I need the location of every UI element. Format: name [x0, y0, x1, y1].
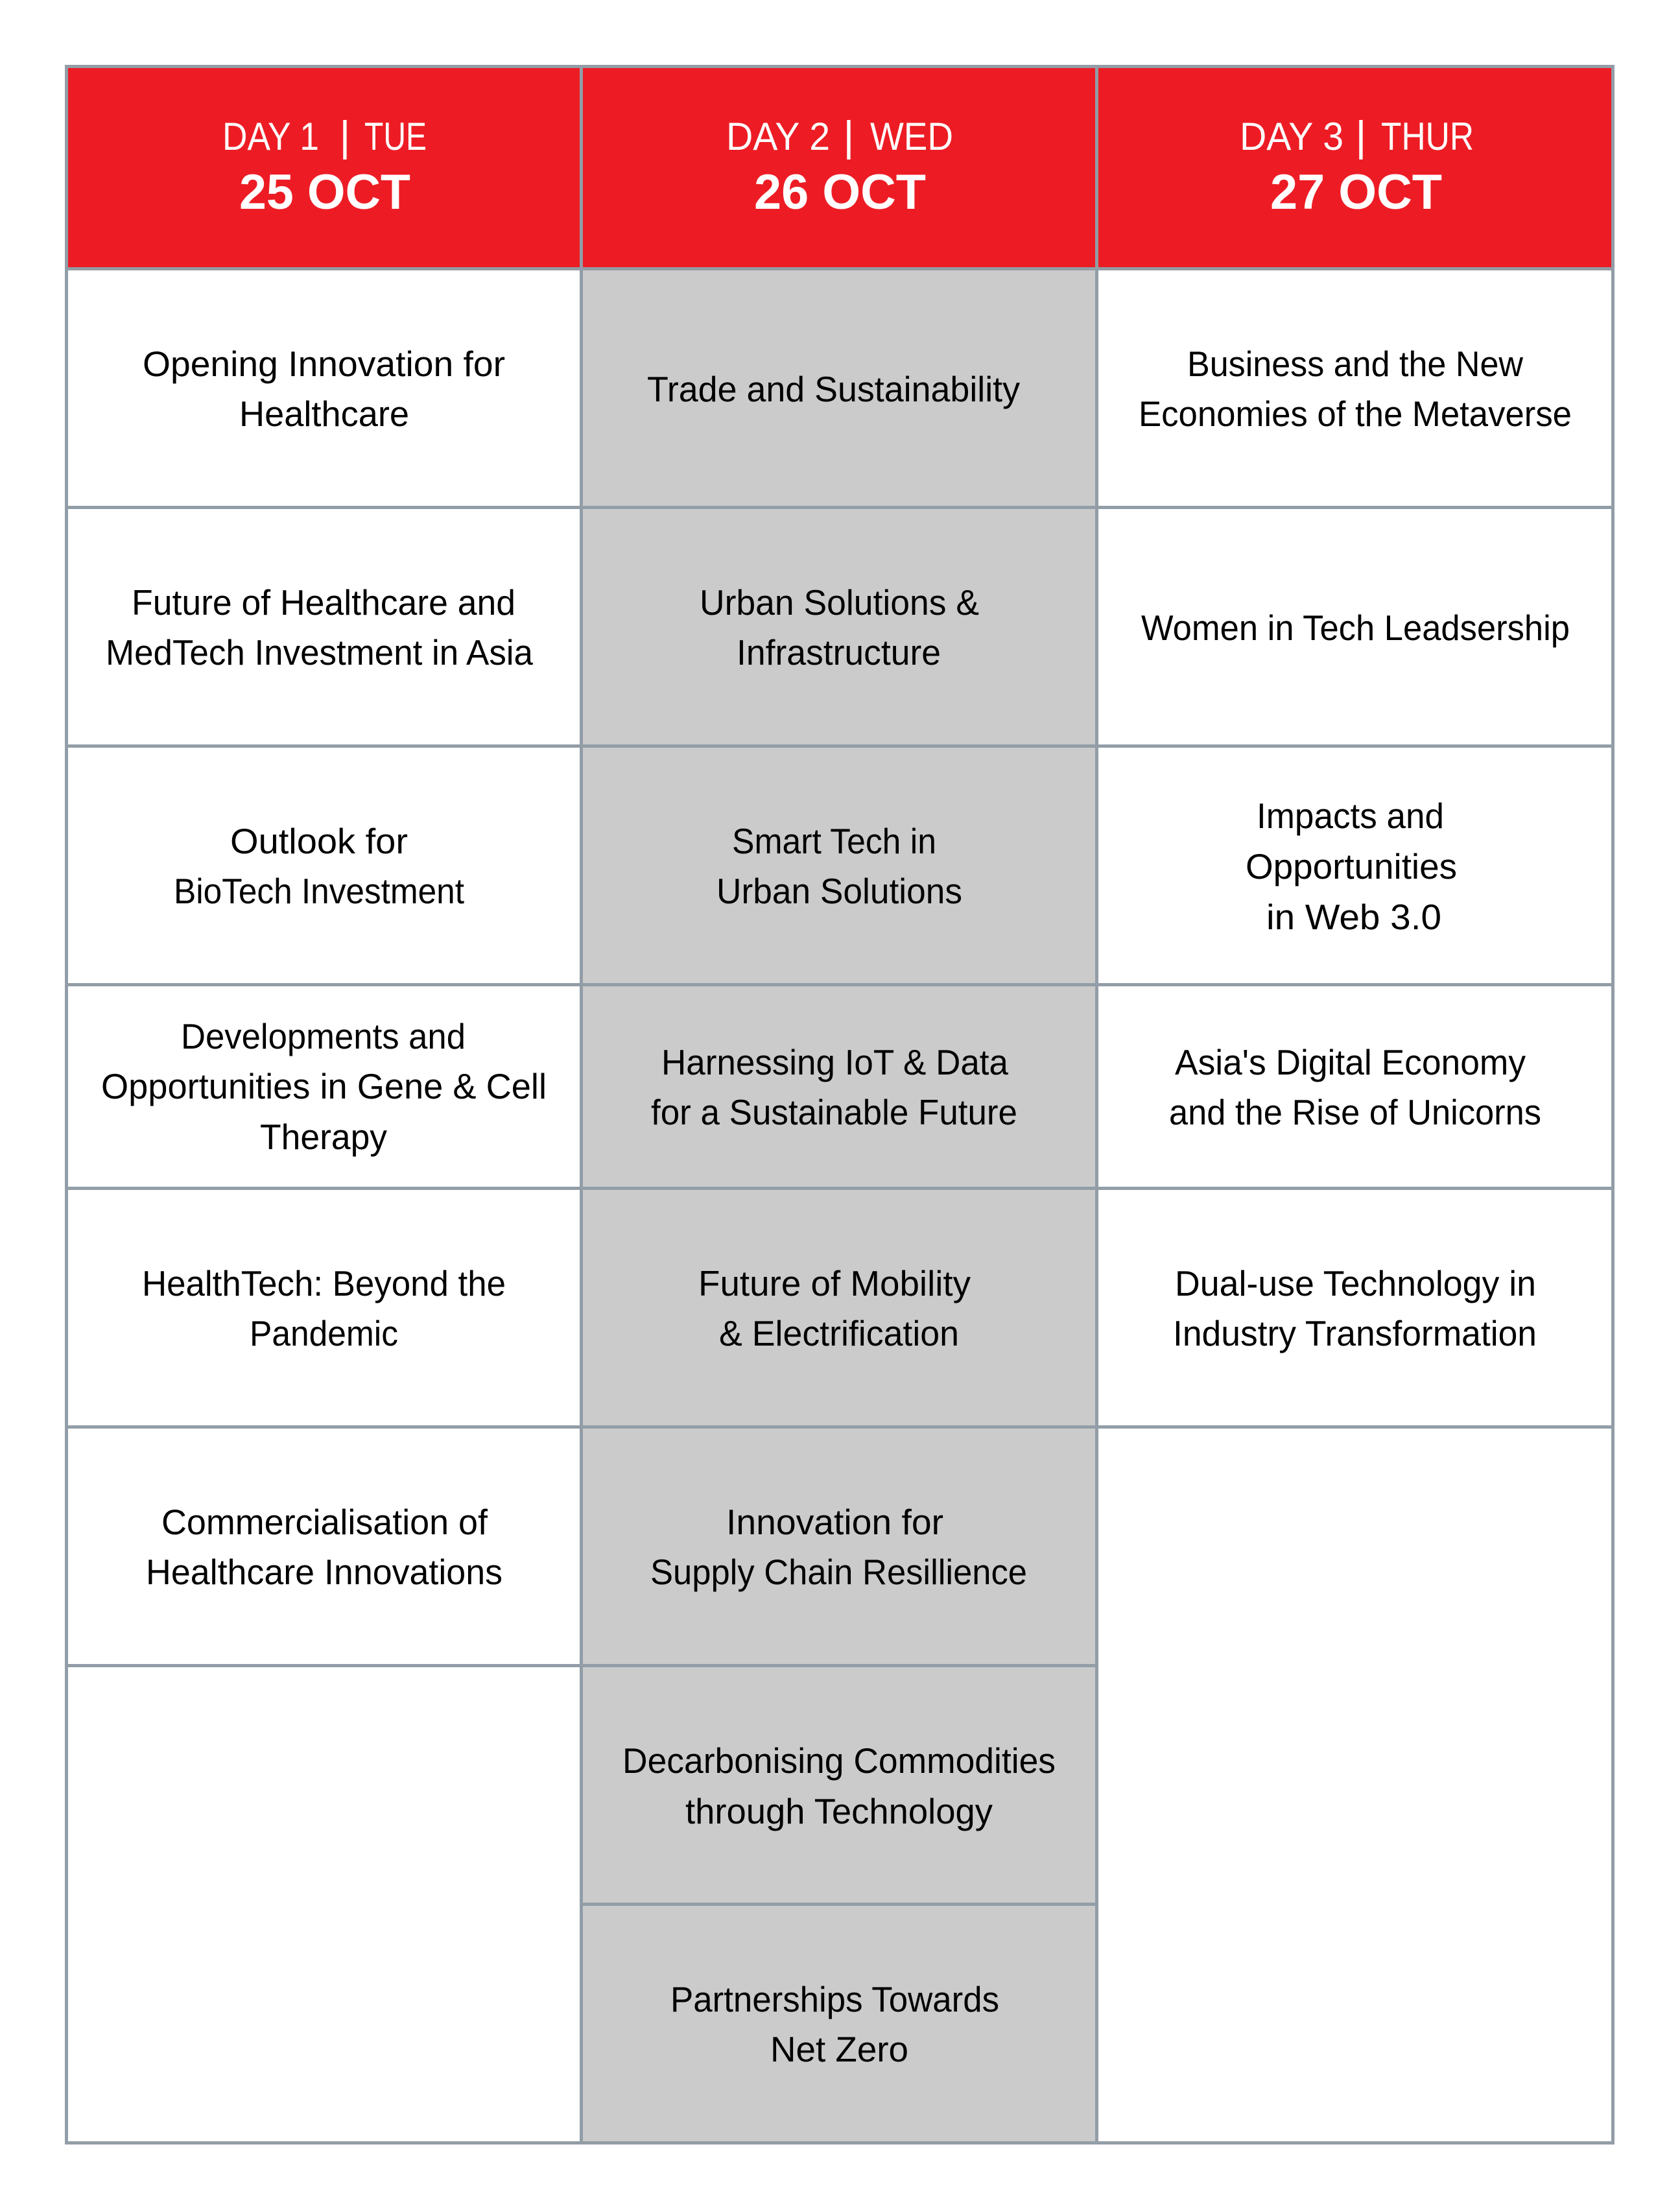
header: day 1: DAY 1 — [222, 115, 319, 158]
header: day 2: 26 OCT — [754, 165, 926, 220]
header: day 2: WED — [870, 115, 953, 158]
day 2 session: Innovation for Supply Chain Resillience: Innovation for — [726, 1502, 943, 1542]
day 1 session: Commercialisation of Healthcare Innovations — [68, 1429, 580, 1664]
day 2 session: Innovation for Supply Chain Resillience — [582, 1427, 1097, 1665]
day 3 session: Business and the New Economies of the Metaverse — [1098, 270, 1611, 506]
day 1 session: Opening Innovation for Healthcare — [68, 270, 580, 506]
day 1 session: Commercialisation of Healthcare Innovations: Commercialisation of — [161, 1502, 488, 1542]
day 3 session: Dual-use Technology in Industry Transformation — [1098, 1190, 1611, 1425]
header: day 2 — [582, 65, 1097, 269]
day 3 session: Business and the New Economies of the Metaverse: Business and the New — [1187, 344, 1523, 384]
day 1 session: Future of Healthcare and MedTech Investment in Asia — [68, 509, 580, 744]
day 3 session: Business and the New Economies of the Metaverse: Economies of the Metaverse — [1139, 394, 1572, 434]
day 2 session: Future of Mobility and Electrification: & Electrification — [719, 1313, 959, 1353]
day 1 session: Commercialisation of Healthcare Innovations: Healthcare Innovations — [146, 1552, 503, 1592]
header: day 1: TUE — [364, 115, 427, 158]
day 1 session: Opening Innovation for Healthcare: Opening Innovation for — [143, 344, 505, 384]
header: day 3: 27 OCT — [1270, 165, 1442, 220]
day 3 session: Asia's Digital Economy and the Rise of Unicorns — [1098, 986, 1611, 1187]
day 3 session: Impacts and Opportunities in Web 3.0 — [1098, 748, 1611, 983]
day 2 session: Smart Tech in Urban Solutions: Urban Solutions — [716, 871, 962, 911]
day 2 session: Partnerships Towards Net Zero: Partnerships Towards — [670, 1979, 999, 2019]
day 2 session: Smart Tech in Urban Solutions — [582, 746, 1097, 984]
day 1 session: HealthTech Beyond the Pandemic — [68, 1190, 580, 1425]
day 1 session: Developments and Opportunities in Gene and Cell Therapy: Developments and — [181, 1016, 466, 1056]
day 2 session: Decarbonising Commodities through Technology — [582, 1665, 1097, 1904]
day 3 session: Women in Tech Leadsership: Women in Tech Leadsership — [1141, 608, 1570, 648]
day 1 session: Outlook for BioTech Investment: BioTech Investment — [174, 871, 464, 911]
header: day 2: | — [843, 112, 854, 160]
day 1 session: Outlook for BioTech Investment — [68, 748, 580, 983]
day 2 session: Trade and Sustainability: Trade and Sustainability — [647, 369, 1020, 409]
day 3 session: Dual-use Technology in Industry Transformation: Industry Transformation — [1173, 1313, 1537, 1353]
day 2 session: Harnessing IoT and Data for a Sustainable Future — [582, 984, 1097, 1188]
day 2 session: Urban Solutions and Infrastructure: Infrastructure — [737, 632, 941, 672]
header: day 3: DAY 3 — [1240, 115, 1343, 158]
header: day 1: 25 OCT — [239, 165, 410, 220]
header: day 3 — [1097, 65, 1615, 269]
day 2 session: Decarbonising Commodities through Technology: through Technology — [685, 1791, 993, 1831]
day 2 session: Smart Tech in Urban Solutions: Smart Tech in — [732, 821, 936, 861]
day 2 session: Urban Solutions and Infrastructure: Urban Solutions & — [700, 582, 979, 623]
day 2 session: Future of Mobility and Electrification — [582, 1188, 1097, 1427]
day 3 session: Impacts and Opportunities in Web 3.0: in Web 3.0 — [1266, 897, 1441, 937]
day 2 session: Future of Mobility and Electrification: Future of Mobility — [698, 1263, 971, 1303]
header: day 1: | — [340, 112, 350, 160]
day 1 session: Future of Healthcare and MedTech Investment in Asia: Future of Healthcare and — [132, 582, 515, 623]
day 1 session: Developments and Opportunities in Gene and Cell Therapy: Therapy — [260, 1117, 387, 1157]
day 2 session: Trade and Sustainability — [582, 269, 1097, 507]
day 1 session: HealthTech Beyond the Pandemic: HealthTech: Beyond the — [142, 1263, 506, 1303]
day 1 session: Developments and Opportunities in Gene and Cell Therapy: Opportunities in Gene & Cell — [101, 1066, 547, 1106]
day 3 session: Asia's Digital Economy and the Rise of Unicorns: Asia's Digital Economy — [1175, 1042, 1526, 1082]
header: day 3: THUR — [1381, 115, 1474, 158]
header: day 3: | — [1355, 112, 1366, 160]
header: day 1 — [65, 65, 582, 269]
day 1 session: Outlook for BioTech Investment: Outlook for — [230, 821, 408, 861]
day 1 session: Developments and Opportunities in Gene and Cell Therapy — [68, 986, 580, 1187]
day 2 session: Partnerships Towards Net Zero — [582, 1904, 1097, 2143]
day 2 session: Harnessing IoT and Data for a Sustainable Future: for a Sustainable Future — [651, 1092, 1017, 1132]
day 2 session: Partnerships Towards Net Zero: Net Zero — [770, 2029, 908, 2069]
day 3 session: Women in Tech Leadsership — [1098, 509, 1611, 744]
day 2 session: Decarbonising Commodities through Technology: Decarbonising Commodities — [622, 1741, 1056, 1781]
day 3 session: Dual-use Technology in Industry Transformation: Dual-use Technology in — [1175, 1263, 1536, 1303]
header: day 2: DAY 2 — [726, 115, 830, 158]
day 1 session: Future of Healthcare and MedTech Investment in Asia: MedTech Investment in Asia — [106, 632, 533, 672]
day 2 session: Harnessing IoT and Data for a Sustainable Future: Harnessing IoT & Data — [661, 1042, 1008, 1082]
day 2 session: Innovation for Supply Chain Resillience: Supply Chain Resillience — [650, 1552, 1027, 1592]
day 1 session: Opening Innovation for Healthcare: Healthcare — [239, 394, 409, 434]
day 1 session: HealthTech Beyond the Pandemic: Pandemic — [250, 1313, 398, 1353]
day 2 session: Urban Solutions and Infrastructure — [582, 507, 1097, 746]
day 3 session: Impacts and Opportunities in Web 3.0: Impacts and — [1257, 796, 1444, 836]
day 3 session: Asia's Digital Economy and the Rise of Unicorns: and the Rise of Unicorns — [1169, 1092, 1541, 1132]
day 3 session: Impacts and Opportunities in Web 3.0: Opportunities — [1246, 846, 1457, 886]
